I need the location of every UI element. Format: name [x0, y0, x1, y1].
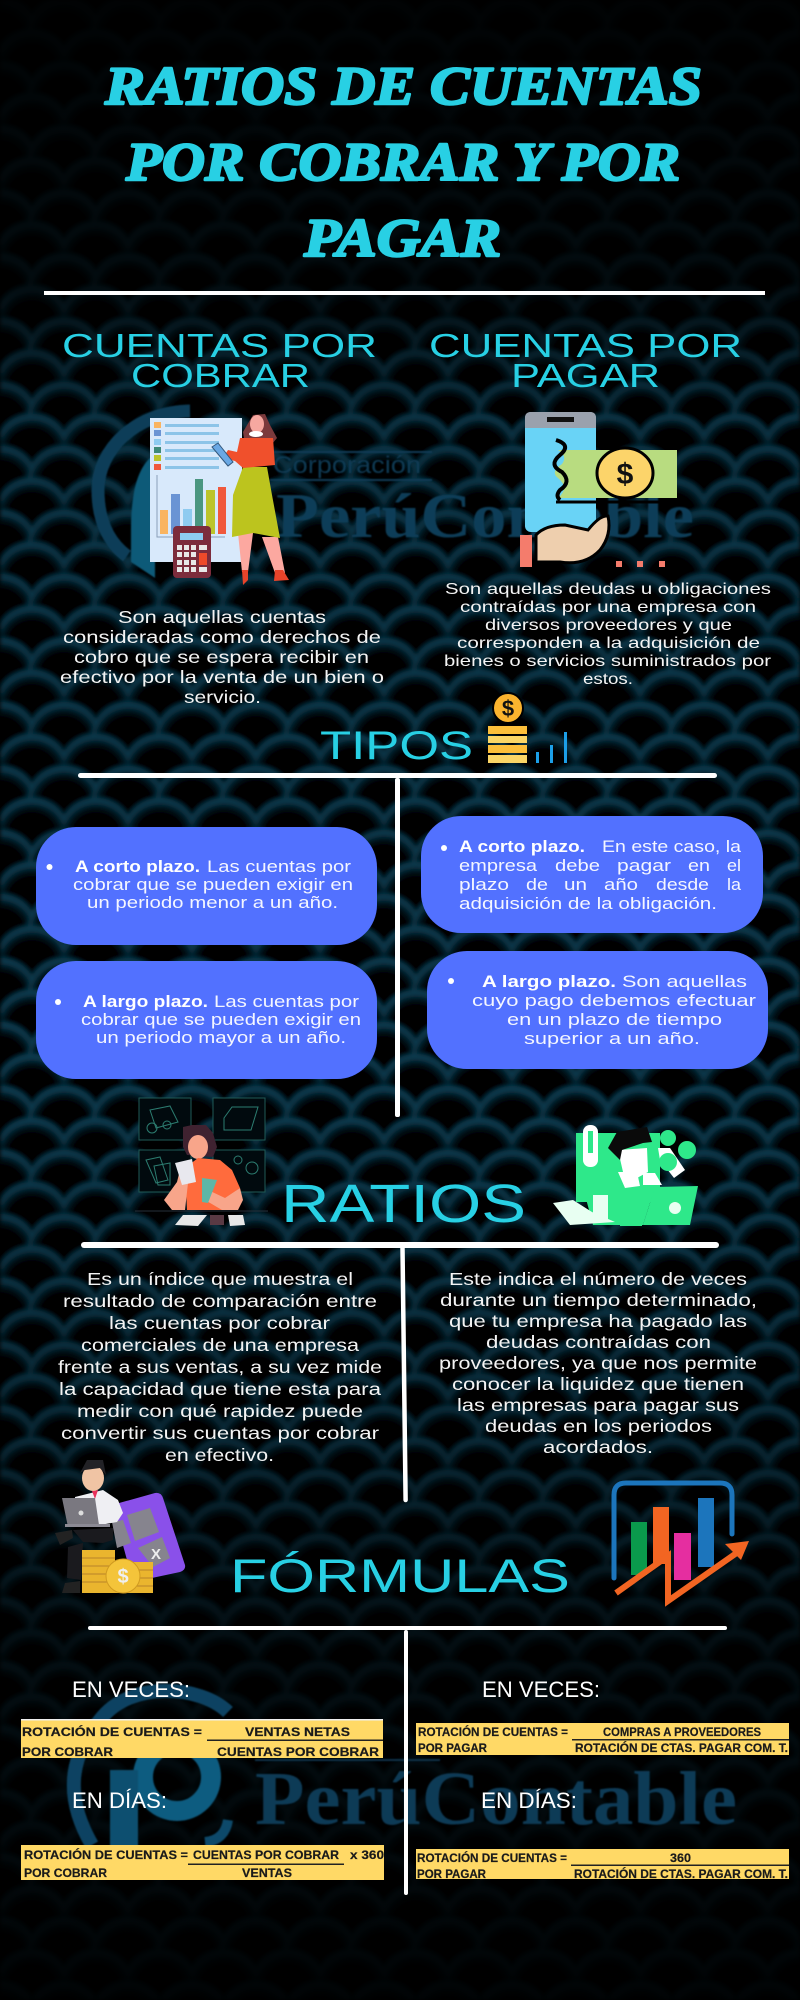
watermark: top logo	[98, 411, 694, 578]
text: ratio cuentas por pagar: conocer la liquidez que tienen	[452, 1374, 744, 1394]
formula: rotacion cobrar en dias	[21, 1845, 384, 1880]
icon: phone with banknote and hand	[520, 412, 680, 567]
text: ratio cuentas por cobrar: Es un índice que muestra el	[87, 1269, 353, 1289]
heading: formulas: FÓRMULAS	[230, 1549, 570, 1602]
formula: rotacion pagar en dias: ROTACIÓN DE CUENTAS =	[417, 1850, 567, 1865]
panel: cobrar corto plazo: un periodo menor a un año.	[87, 893, 338, 912]
formula: rotacion pagar en veces: POR PAGAR	[418, 1741, 487, 1755]
text: definition cuentas por cobrar: efectivo por la venta de un bien o	[60, 667, 384, 687]
formula: rotacion cobrar en dias: VENTAS	[242, 1866, 292, 1880]
formula: rotacion cobrar en veces	[21, 1719, 383, 1759]
text: ratio cuentas por pagar: acordados.	[543, 1437, 653, 1457]
text: ratio cuentas por cobrar: frente a sus ventas, a su vez mide	[58, 1357, 382, 1377]
formula: rotacion cobrar en dias: POR COBRAR	[24, 1866, 107, 1880]
heading: ratios: RATIOS	[281, 1174, 526, 1234]
text: ratio cuentas por cobrar: convertir sus cuentas por cobrar	[61, 1423, 379, 1443]
text: ratio cuentas por pagar: deudas contraídas con	[486, 1332, 711, 1352]
formula: rotacion cobrar en dias: x 360	[350, 1848, 384, 1862]
icon: coin stack and bars	[488, 693, 567, 763]
panel: pagar largo plazo: Son aquellas	[622, 972, 747, 991]
icon: bar chart with arrow	[614, 1483, 749, 1601]
label: en dias derecha: EN DÍAS:	[481, 1788, 577, 1813]
formula: rotacion cobrar en veces: VENTAS NETAS	[245, 1725, 350, 1739]
icon: phone with banknote and hand: $	[617, 458, 634, 491]
formula: rotacion cobrar en dias: CUENTAS POR COBRAR	[193, 1848, 339, 1862]
panel: pagar corto plazo: de	[526, 875, 548, 894]
formula: rotacion pagar en dias	[416, 1849, 789, 1881]
woman	[212, 414, 289, 585]
label: en dias izquierda: EN DÍAS:	[72, 1788, 167, 1813]
panel: pagar corto plazo	[421, 816, 763, 933]
panel: pagar corto plazo: debe	[555, 856, 600, 875]
icon: businessman on coins with calculator	[55, 1460, 185, 1593]
label: en veces izquierda: EN VECES:	[72, 1677, 190, 1702]
panel: cobrar largo plazo: Las cuentas por	[214, 992, 359, 1011]
text: definition cuentas por cobrar: cobro que se espera recibir en	[74, 647, 369, 667]
formula: rotacion pagar en dias: 360	[670, 1851, 691, 1865]
heading: tipos: TIPOS	[320, 724, 473, 768]
panel: cobrar largo plazo: un periodo mayor a un año.	[96, 1028, 346, 1047]
text: ratio cuentas por pagar: que tu empresa ha pagado las	[449, 1311, 747, 1331]
icon: man studying at laptop	[553, 1125, 698, 1226]
label: en veces derecha: EN VECES:	[482, 1677, 600, 1702]
panel: pagar corto plazo: A corto plazo.	[459, 837, 585, 856]
title: RATIOS DE CUENTAS	[104, 56, 702, 116]
panel: pagar corto plazo: plazo	[459, 875, 509, 894]
text: definition cuentas por pagar: diversos proveedores y que	[485, 617, 732, 634]
text: ratio cuentas por pagar: Este indica el número de veces	[449, 1269, 747, 1289]
text: definition cuentas por pagar: bienes o servicios suministrados por	[444, 653, 772, 670]
panel: pagar largo plazo: en un plazo de tiempo	[507, 1010, 722, 1029]
title: PAGAR	[303, 208, 501, 268]
panel: pagar corto plazo: año	[604, 875, 638, 894]
heading: cuentas por pagar: PAGAR	[511, 357, 660, 394]
text: ratio cuentas por cobrar: comerciales de una empresa	[81, 1335, 359, 1355]
watermark: bottom logo: PerúContable	[255, 1757, 737, 1841]
panel: pagar corto plazo: en	[688, 856, 710, 875]
panel: cobrar largo plazo: cobrar que se pueden exigir en	[81, 1010, 361, 1029]
calculator	[173, 526, 211, 578]
text: ratio cuentas por cobrar: las cuentas por cobrar	[109, 1313, 330, 1333]
panel: cobrar corto plazo: Las cuentas por	[207, 857, 351, 876]
formula: rotacion pagar en veces	[416, 1723, 789, 1755]
panel: pagar corto plazo: pagar	[617, 856, 671, 875]
panel: cobrar corto plazo	[36, 827, 377, 945]
panel: pagar largo plazo: A largo plazo.	[482, 972, 616, 991]
text: ratio cuentas por pagar: deudas en los periodos	[485, 1416, 712, 1436]
text: definition cuentas por pagar: corresponden a la adquisición de	[457, 635, 760, 652]
text: definition cuentas por cobrar	[60, 607, 384, 707]
panel: pagar corto plazo: la	[727, 875, 742, 894]
heading: cuentas por cobrar: CUENTAS POR	[62, 327, 377, 364]
panel: cobrar corto plazo: cobrar que se pueden exigir en	[73, 875, 353, 894]
text: ratio cuentas por cobrar	[58, 1269, 382, 1465]
title: POR COBRAR Y POR	[125, 132, 680, 192]
text: definition cuentas por pagar: estos.	[583, 671, 633, 688]
heading: cuentas por pagar: CUENTAS POR	[429, 327, 742, 364]
text: definition cuentas por pagar: Son aquellas deudas u obligaciones	[445, 581, 771, 598]
formula: rotacion pagar en veces: ROTACIÓN DE CTAS. PAGAR COM. T.	[575, 1740, 788, 1755]
panel: pagar largo plazo: cuyo pago debemos efectuar	[472, 991, 756, 1010]
panel: pagar largo plazo	[427, 951, 768, 1069]
panel: pagar corto plazo: un	[564, 875, 587, 894]
text: definition cuentas por cobrar: servicio.	[184, 687, 261, 707]
panel: pagar corto plazo: En este caso, la	[602, 837, 742, 856]
text: definition cuentas por cobrar: Son aquellas cuentas	[118, 607, 326, 627]
watermark: top logo: PerúContable	[276, 480, 694, 551]
text: ratio cuentas por cobrar: resultado de comparación entre	[63, 1291, 377, 1311]
formula: rotacion cobrar en veces: CUENTAS POR COBRAR	[217, 1745, 379, 1759]
formula: rotacion cobrar en dias: ROTACIÓN DE CUENTAS =	[24, 1847, 188, 1862]
panel: pagar largo plazo: superior a un año.	[524, 1029, 700, 1048]
panel: cobrar corto plazo: A corto plazo.	[75, 857, 200, 876]
text: ratio cuentas por pagar	[439, 1269, 757, 1457]
text: ratio cuentas por cobrar: la capacidad que tiene esta para	[59, 1379, 381, 1399]
text: ratio cuentas por pagar: las empresas para pagar sus	[457, 1395, 739, 1415]
title	[104, 56, 702, 268]
icon: woman with bills	[135, 1098, 268, 1226]
formula: rotacion pagar en veces: COMPRAS A PROVEEDORES	[603, 1725, 761, 1739]
watermark: top logo: Corporación	[273, 452, 421, 479]
formula: rotacion cobrar en veces: ROTACIÓN DE CUENTAS =	[22, 1724, 202, 1739]
text: definition cuentas por pagar: contraídas por una empresa con	[460, 599, 756, 616]
panel: pagar corto plazo: el	[727, 856, 741, 875]
icon: coin stack and bars: $	[502, 696, 514, 721]
panel: pagar corto plazo: desde	[656, 875, 709, 894]
panel: cobrar largo plazo: A largo plazo.	[83, 992, 208, 1011]
text: ratio cuentas por pagar: durante un tiempo determinado,	[440, 1290, 757, 1310]
heading: cuentas por cobrar: COBRAR	[131, 357, 310, 394]
formula: rotacion pagar en dias: ROTACIÓN DE CTAS. PAGAR COM. T.	[574, 1866, 788, 1881]
watermark: bottom logo	[74, 1691, 737, 1850]
icon: businessman on coins with calculator: X	[151, 1546, 161, 1563]
formula: rotacion cobrar en veces: POR COBRAR	[22, 1745, 113, 1759]
formula: rotacion pagar en veces: ROTACIÓN DE CUENTAS =	[418, 1724, 568, 1739]
formula: rotacion pagar en dias: POR PAGAR	[417, 1867, 486, 1881]
text: definition cuentas por cobrar: consideradas como derechos de	[63, 627, 381, 647]
panel: pagar corto plazo: empresa	[459, 856, 538, 875]
icon: woman with chart board	[150, 414, 289, 585]
panel: cobrar largo plazo	[36, 961, 377, 1079]
text: ratio cuentas por cobrar: en efectivo.	[165, 1445, 274, 1465]
heading: cuentas por cobrar	[62, 327, 377, 394]
text: ratio cuentas por pagar: proveedores, ya que nos permite	[439, 1353, 757, 1373]
panel: pagar corto plazo: adquisición de la obligación.	[459, 894, 717, 913]
heading: cuentas por pagar	[429, 327, 742, 394]
text: ratio cuentas por cobrar: medir con qué rapidez puede	[77, 1401, 363, 1421]
text: definition cuentas por pagar	[444, 581, 772, 688]
icon: businessman on coins with calculator: $	[117, 1566, 129, 1588]
